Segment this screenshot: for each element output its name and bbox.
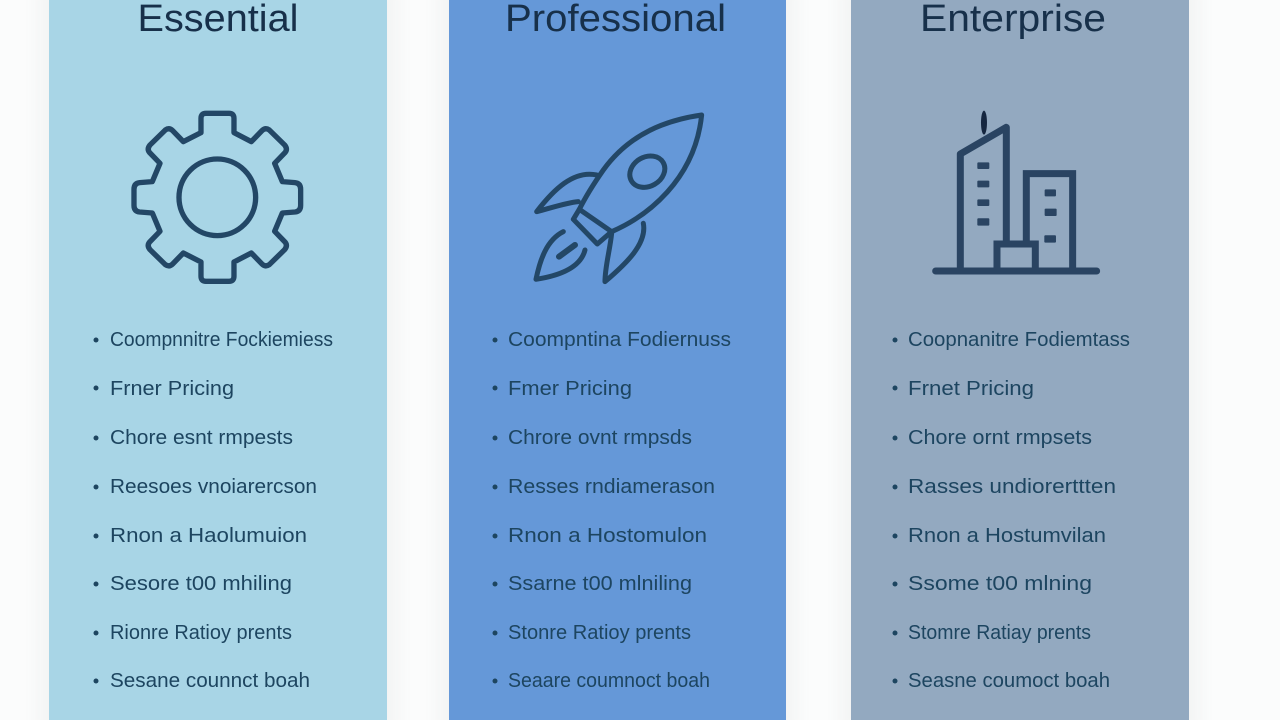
feature list: Enterprise: Ssome t00 mlning bbox=[908, 573, 1092, 595]
feature list: Enterprise: Seasne coumoct boah bbox=[908, 670, 1110, 692]
feature list: Essential: Sesore t00 mhiling bbox=[110, 573, 292, 595]
feature list: Professional: Chrore ovnt rmpsds bbox=[508, 427, 692, 449]
feature list: Enterprise: Coopnanitre Fodiemtass bbox=[908, 329, 1130, 351]
feature list: Essential: Frner Pricing bbox=[110, 378, 234, 400]
panel: Enterprise bbox=[851, 0, 1189, 720]
feature list: Professional: Resses rndiamerason bbox=[508, 476, 715, 498]
panel: Essential bbox=[49, 0, 387, 720]
feature list: Professional: Fmer Pricing bbox=[508, 378, 632, 400]
feature list: Essential: Coompnnitre Fockiemiess bbox=[110, 329, 333, 351]
feature list: Professional bbox=[492, 329, 731, 692]
feature list: Essential: Chore esnt rmpests bbox=[110, 427, 293, 449]
feature list: Professional: Coompntina Fodiernuss bbox=[508, 329, 731, 351]
feature list: Essential: Rionre Ratioy prents bbox=[110, 622, 292, 644]
icon: office buildings bbox=[936, 111, 1097, 271]
feature list: Professional: Rnon a Hostomulon bbox=[508, 525, 707, 547]
icon: gear bbox=[134, 113, 301, 281]
feature list: Enterprise bbox=[892, 329, 1130, 692]
feature list: Essential: Reesoes vnoiarercson bbox=[110, 476, 317, 498]
feature list: Essential: Sesane counnct boah bbox=[110, 670, 310, 692]
feature list: Enterprise: Frnet Pricing bbox=[908, 378, 1034, 400]
feature list: Enterprise: Stomre Ratiay prents bbox=[908, 622, 1091, 644]
feature list: Enterprise: Rnon a Hostumvilan bbox=[908, 525, 1106, 547]
feature list: Essential: Rnon a Haolumuion bbox=[110, 525, 307, 547]
feature list: Essential bbox=[94, 329, 333, 692]
icon: rocket bbox=[536, 115, 702, 282]
feature list: Professional: Stonre Ratioy prents bbox=[508, 622, 691, 644]
feature list: Enterprise: Rasses undiorerttten bbox=[908, 476, 1116, 498]
feature list: Professional: Ssarne t00 mlniling bbox=[508, 573, 692, 595]
feature list: Professional: Seaare coumnoct boah bbox=[508, 670, 710, 692]
panel: Professional bbox=[449, 0, 786, 720]
feature list: Enterprise: Chore ornt rmpsets bbox=[908, 427, 1092, 449]
